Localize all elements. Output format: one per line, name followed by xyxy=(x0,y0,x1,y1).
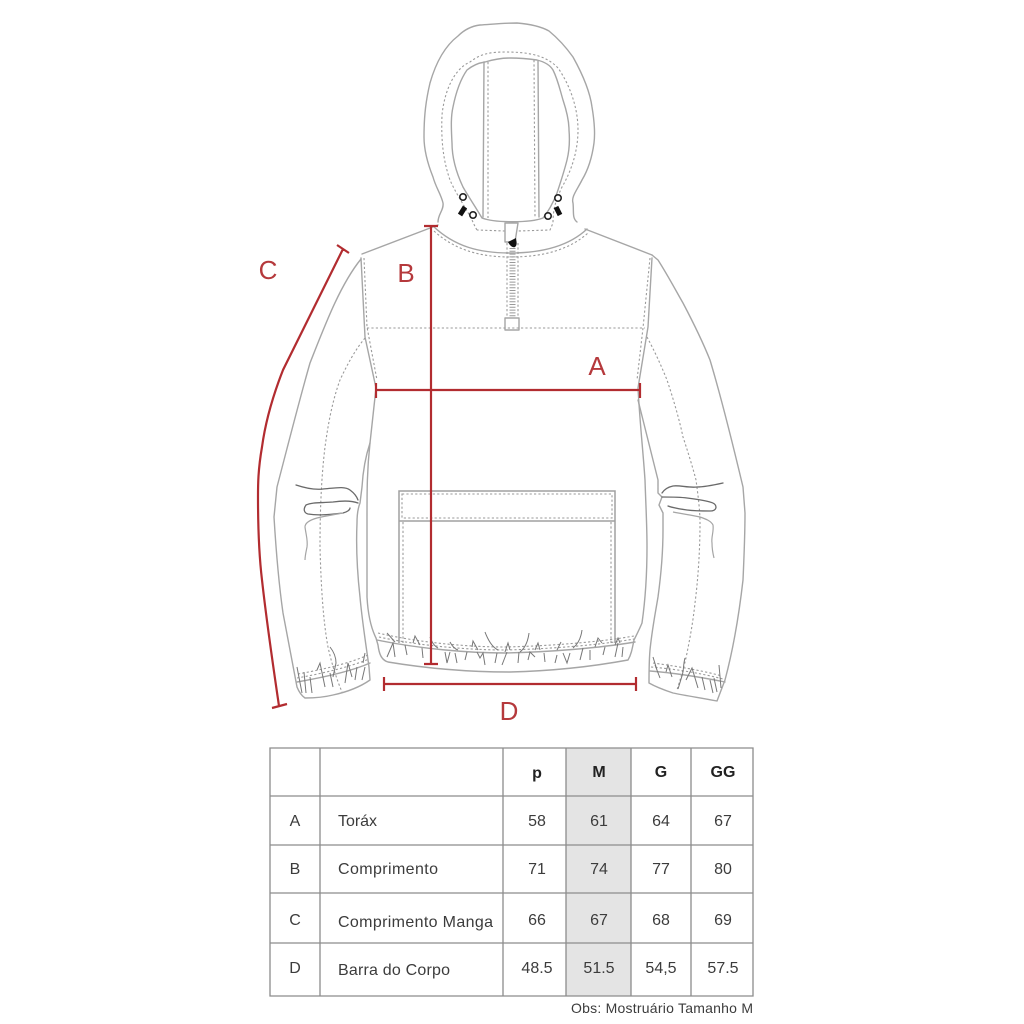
left sleeve xyxy=(274,259,370,698)
footnote: Obs: Mostruário Tamanho M xyxy=(571,1000,753,1016)
hood drawcords xyxy=(460,194,561,219)
row D xyxy=(289,960,739,979)
header row: GG xyxy=(711,764,735,781)
header row: G xyxy=(655,764,667,781)
row C: Comprimento Manga xyxy=(338,914,493,931)
row B: Comprimento xyxy=(338,861,438,878)
measurement C: sleeve length xyxy=(258,245,349,708)
row D: D xyxy=(289,960,301,977)
jacket body xyxy=(361,225,652,672)
collar and zipper xyxy=(433,223,588,330)
row A: 67 xyxy=(714,813,732,830)
measurement B: length: B xyxy=(397,258,415,288)
row A: 61 xyxy=(590,813,608,830)
row B: 74 xyxy=(590,861,608,878)
row A: 64 xyxy=(652,813,670,830)
measurement D: hem width xyxy=(384,677,636,726)
measurement D: hem width: D xyxy=(500,696,518,726)
row D: 54,5 xyxy=(645,960,677,977)
header row: M xyxy=(592,764,606,781)
row B xyxy=(290,861,732,878)
row C: C xyxy=(289,912,301,929)
row D: Barra do Corpo xyxy=(338,962,450,979)
measurement B: length xyxy=(397,226,438,664)
jacket technical drawing xyxy=(274,23,745,701)
table grid xyxy=(270,748,753,996)
row C: 66 xyxy=(528,912,546,929)
row C: 69 xyxy=(714,912,732,929)
row B: B xyxy=(290,861,300,878)
header row xyxy=(532,764,735,782)
hood xyxy=(424,23,595,231)
hem gathers xyxy=(387,630,623,665)
row B: 80 xyxy=(714,861,732,878)
right sleeve xyxy=(638,255,745,701)
header row: p xyxy=(532,765,542,782)
measurement A: chest: A xyxy=(588,351,606,381)
row D: 48.5 xyxy=(521,960,553,977)
row C: 67 xyxy=(590,912,608,929)
row D: 51.5 xyxy=(583,960,615,977)
row B: 77 xyxy=(652,861,670,878)
size table xyxy=(270,748,753,996)
row B: 71 xyxy=(528,861,546,878)
row C: 68 xyxy=(652,912,670,929)
highlighted M column xyxy=(566,748,631,996)
row A xyxy=(290,813,732,830)
row A: 58 xyxy=(528,813,546,830)
row A: Toráx xyxy=(338,813,377,830)
row C xyxy=(289,912,732,931)
row A: A xyxy=(290,813,301,830)
front pocket xyxy=(399,491,615,643)
measurement A: chest xyxy=(376,351,640,398)
row D: 57.5 xyxy=(707,960,739,977)
measurement C: sleeve length: C xyxy=(259,255,277,285)
